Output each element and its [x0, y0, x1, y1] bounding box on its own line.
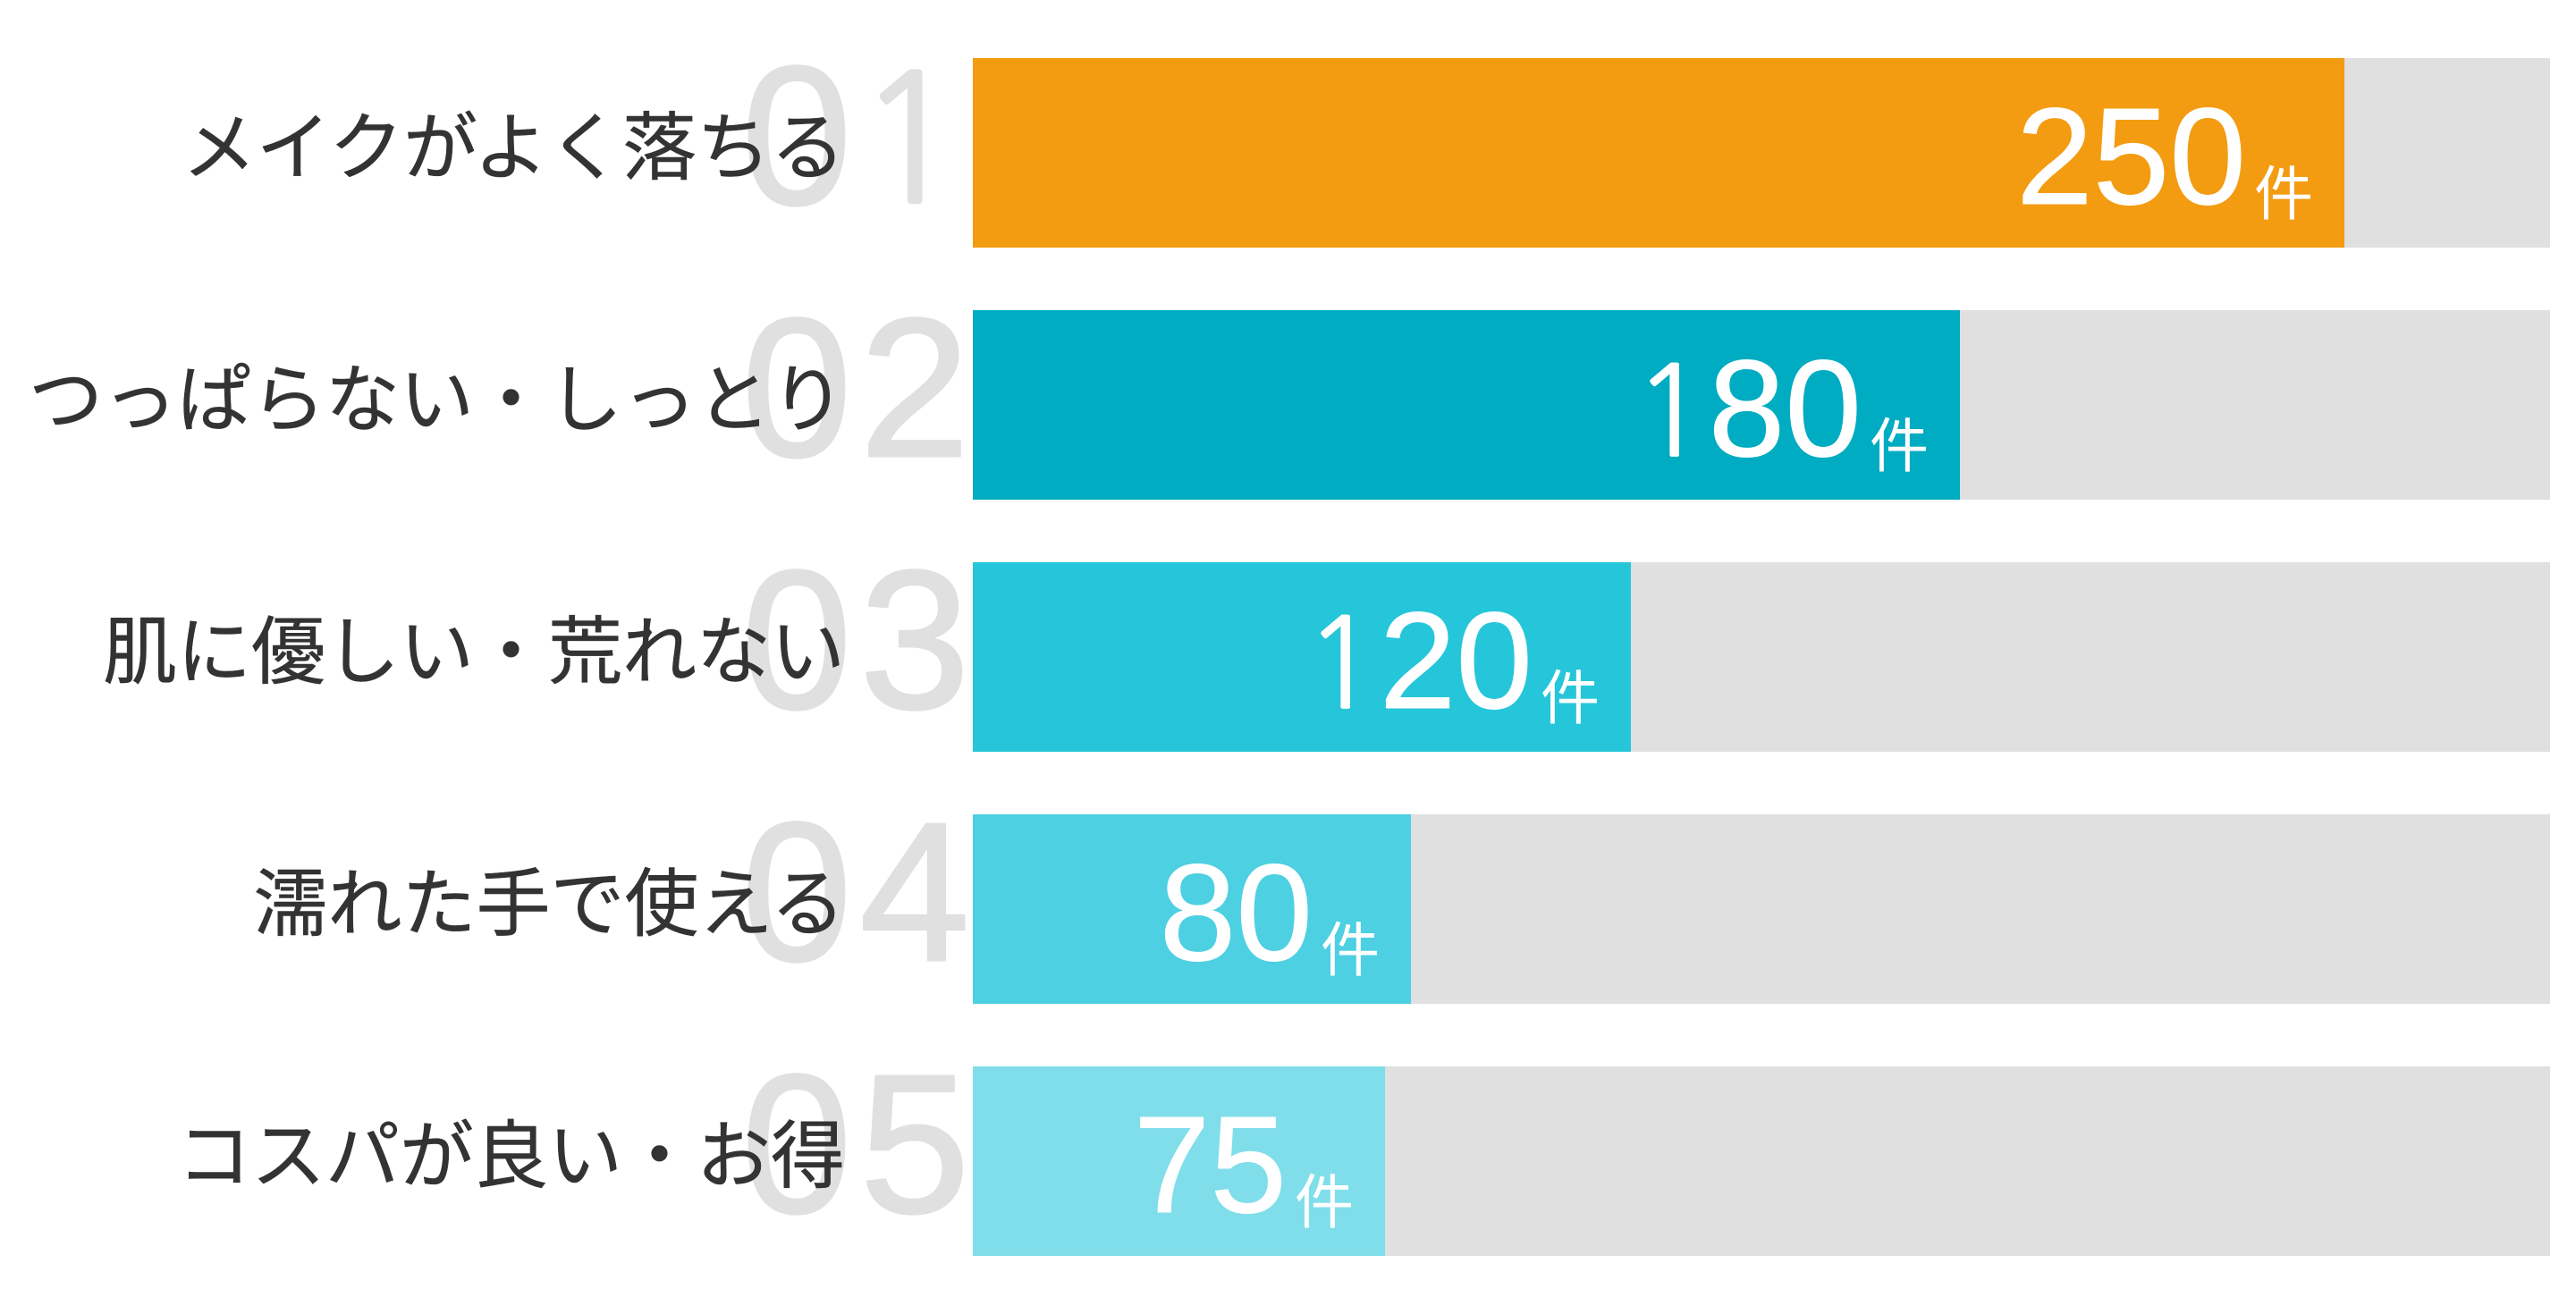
- rank number 05: 5: [860, 1033, 969, 1254]
- unit 件: 件: [1870, 413, 1929, 479]
- label: メイクがよく落ちる: メイクがよく落ちる: [182, 106, 845, 190]
- bar track 01: [973, 58, 2550, 248]
- rank number 01: 1: [856, 51, 963, 228]
- label: 肌に優しい・荒れない: 肌に優しい・荒れない: [103, 611, 845, 694]
- rank number 05: [742, 1033, 969, 1254]
- rank number 02: 2: [860, 277, 969, 498]
- rank number 04: 4: [860, 781, 969, 1002]
- unit 件: 件: [1541, 665, 1600, 731]
- row 01: [182, 25, 2550, 248]
- bar track 02: [973, 310, 2550, 500]
- value 180: 180: [1633, 332, 1862, 485]
- rank number 04: 0: [742, 781, 851, 1002]
- label: コスパが良い・お得: コスパが良い・お得: [177, 1115, 845, 1198]
- bar track 03: [973, 562, 2550, 752]
- rank number 03: [742, 529, 969, 750]
- bar fill 04: [973, 814, 1411, 1004]
- rank number 03: 0: [742, 529, 851, 750]
- row 05: [177, 1033, 2550, 1256]
- row 02: [29, 277, 2550, 500]
- value 80: 80: [1160, 836, 1313, 990]
- value 250: 250: [2016, 80, 2246, 233]
- label: つっぱらない・しっとり: つっぱらない・しっとり: [29, 358, 845, 442]
- row 03: [103, 529, 2550, 752]
- label: 濡れた手で使える: 濡れた手で使える: [253, 863, 845, 946]
- rank number 02: 0: [742, 277, 851, 498]
- bar track 04: [973, 814, 2550, 1004]
- bar fill 01: [973, 58, 2344, 248]
- row 04: [253, 781, 2550, 1004]
- unit 件: 件: [2254, 161, 2313, 227]
- rank number 02: [742, 277, 969, 498]
- value 120: 120: [1304, 584, 1533, 737]
- unit 件: 件: [1295, 1169, 1354, 1235]
- rank number 01: 0: [742, 25, 851, 246]
- rank number 05: 0: [742, 1033, 851, 1254]
- rank number 04: [742, 781, 969, 1002]
- unit 件: 件: [1321, 917, 1380, 983]
- bar fill 02: [973, 310, 1960, 500]
- value 75: 75: [1134, 1088, 1287, 1242]
- rank number 01: [742, 25, 963, 246]
- bar fill 05: [973, 1066, 1385, 1256]
- bar track 05: [973, 1066, 2550, 1256]
- bar fill 03: [973, 562, 1631, 752]
- rank number 03: 3: [860, 529, 969, 750]
